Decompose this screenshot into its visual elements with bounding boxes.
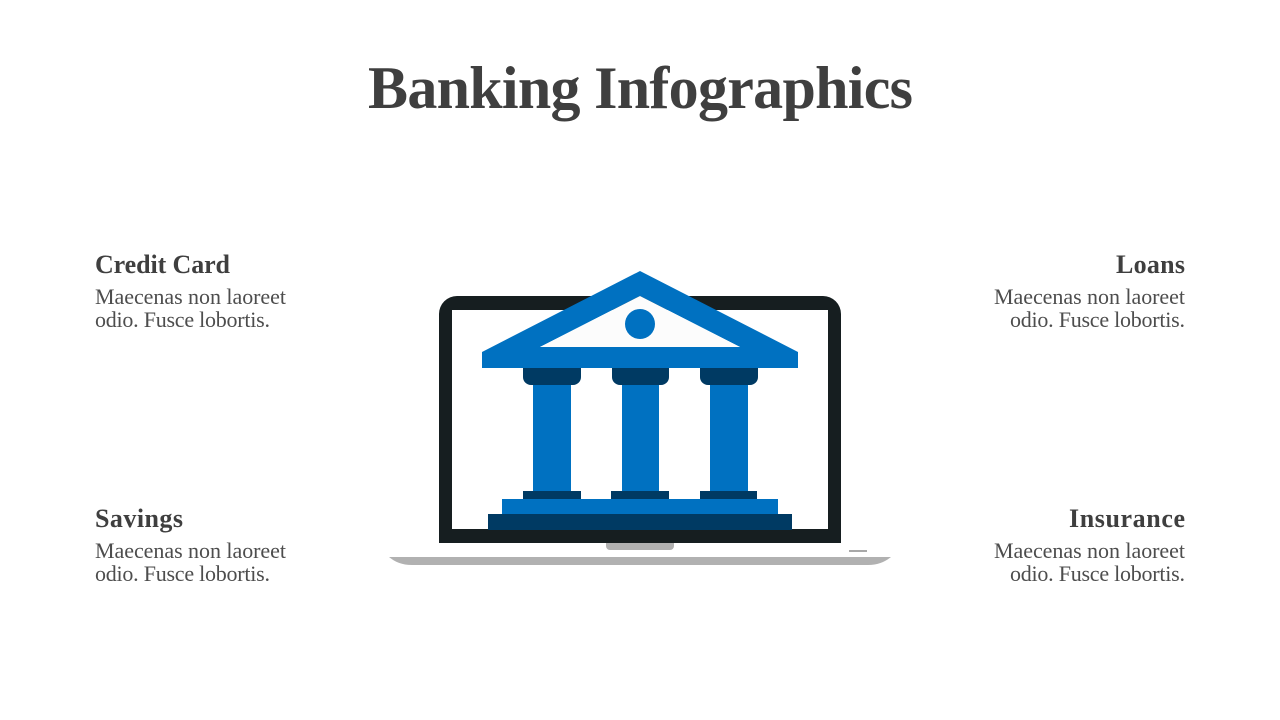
bank building <box>482 271 798 530</box>
column: middle <box>611 368 669 499</box>
body: Loans: odio. Fusce lobortis. <box>1010 307 1185 332</box>
column: right <box>700 368 758 499</box>
laptop notch <box>606 543 674 550</box>
heading: Savings: Savings <box>95 504 183 533</box>
body: Credit Card <box>95 284 286 332</box>
title: Banking Infographics <box>368 55 913 121</box>
body: Insurance: odio. Fusce lobortis. <box>1010 561 1185 586</box>
heading: Insurance: Insurance <box>1069 504 1185 533</box>
text block: Insurance <box>994 504 1185 586</box>
body: Credit Card: Maecenas non laoreet <box>95 284 286 309</box>
icon: laptop with bank building <box>389 271 891 565</box>
laptop base shadow <box>389 557 891 565</box>
heading: Credit Card: Credit Card <box>95 250 231 279</box>
body: Savings: Maecenas non laoreet <box>95 538 286 563</box>
body: Savings: odio. Fusce lobortis. <box>95 561 270 586</box>
upper step <box>502 499 778 514</box>
laptop screen frame <box>439 296 841 543</box>
heading: Loans: Loans <box>1116 250 1185 279</box>
text block: Loans <box>994 250 1185 332</box>
lower step <box>488 514 792 530</box>
body: Savings <box>95 538 286 586</box>
text block: Credit Card <box>95 250 286 332</box>
body: Loans: Maecenas non laoreet <box>994 284 1185 309</box>
body: Insurance: Maecenas non laoreet <box>994 538 1185 563</box>
roof <box>482 271 798 368</box>
body: Loans <box>994 284 1185 332</box>
pediment fill <box>540 296 740 347</box>
body: Credit Card: odio. Fusce lobortis. <box>95 307 270 332</box>
laptop indicator <box>849 550 867 552</box>
column: left <box>523 368 581 499</box>
roof emblem <box>625 309 655 339</box>
body: Insurance <box>994 538 1185 586</box>
text block: Savings <box>95 504 286 586</box>
